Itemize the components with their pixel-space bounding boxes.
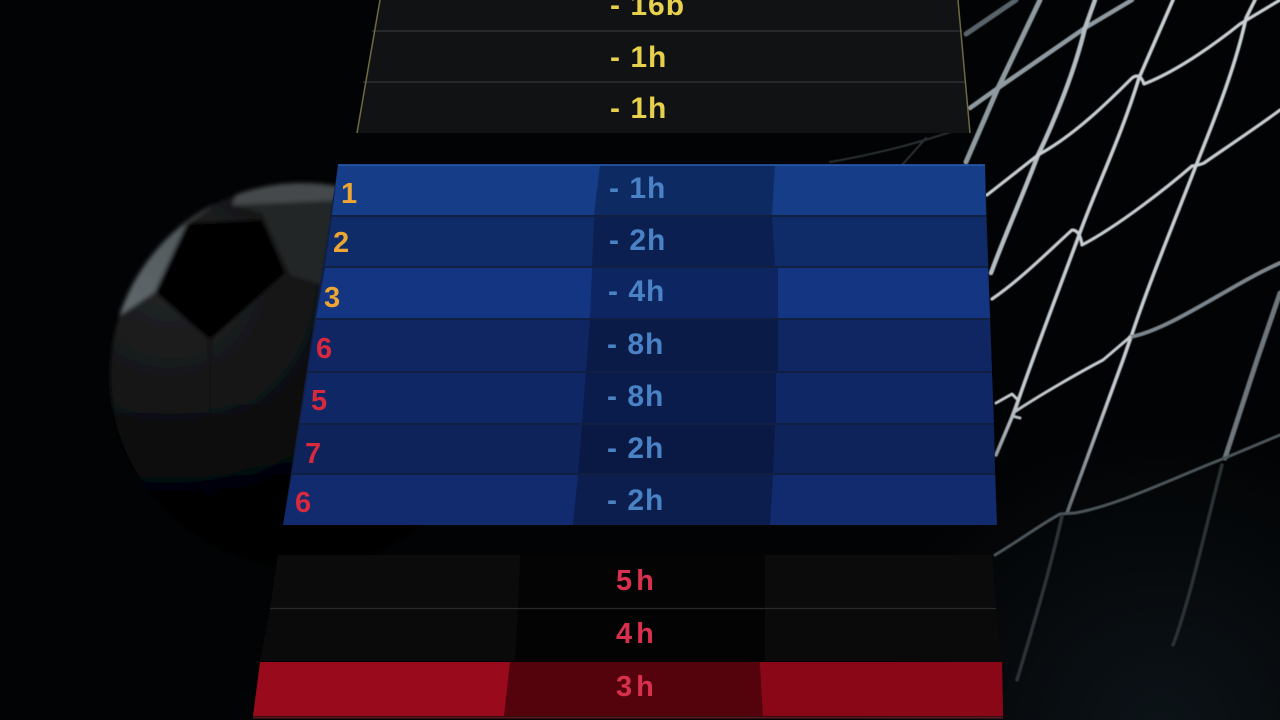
row 1 — [332, 165, 986, 215]
ball highlight rim — [117, 204, 212, 318]
panel: top dark table — [357, 0, 970, 133]
lower row 1 — [270, 555, 996, 608]
second row value: - 1h — [610, 41, 667, 74]
faint strands behind the panel — [830, 128, 962, 165]
top panel edges — [357, 0, 380, 133]
row 4 — [308, 320, 992, 371]
row 1: 1 — [341, 178, 357, 210]
top panel rows — [357, 0, 970, 133]
third row value: - 1h — [610, 92, 667, 125]
icon: goal net — [830, 0, 1280, 680]
row 4: - 8h — [607, 328, 664, 361]
panel: blue table — [283, 165, 997, 525]
row 5 — [300, 373, 994, 423]
ball lower panel seam — [208, 340, 212, 500]
ball black pentagon — [155, 220, 285, 340]
row 7: - 2h — [607, 484, 664, 517]
row 5: - 8h — [607, 380, 664, 413]
row 3: - 4h — [608, 275, 665, 308]
row 2: - 2h — [609, 224, 666, 257]
row 7 — [283, 475, 997, 525]
row 4: 6 — [316, 333, 332, 365]
row 6: 7 — [305, 438, 321, 470]
row 6: - 2h — [607, 432, 664, 465]
row 1: - 1h — [609, 172, 666, 205]
row 2 — [325, 217, 988, 266]
blue table highlight edge — [338, 164, 985, 166]
lower row 3: highlighted red: 3h — [616, 671, 658, 703]
row 3: 3 — [324, 282, 340, 314]
lower row 3: highlighted red — [253, 662, 1003, 718]
row 3 — [316, 268, 990, 318]
icon: soccer ball — [109, 180, 335, 497]
ball upper panel — [242, 200, 332, 286]
lower row 2 — [260, 608, 1001, 661]
row 7: 6 — [295, 487, 311, 519]
lower row 2: 4h — [616, 618, 658, 650]
blue table backing — [283, 165, 997, 525]
row 2: 2 — [333, 227, 349, 259]
row 5: 5 — [311, 385, 327, 417]
panel: lower table — [253, 555, 1003, 718]
ball fade — [111, 404, 294, 532]
lower right glow — [850, 430, 1280, 720]
lower row 1: 5h — [616, 565, 658, 597]
row 6 — [292, 425, 995, 473]
